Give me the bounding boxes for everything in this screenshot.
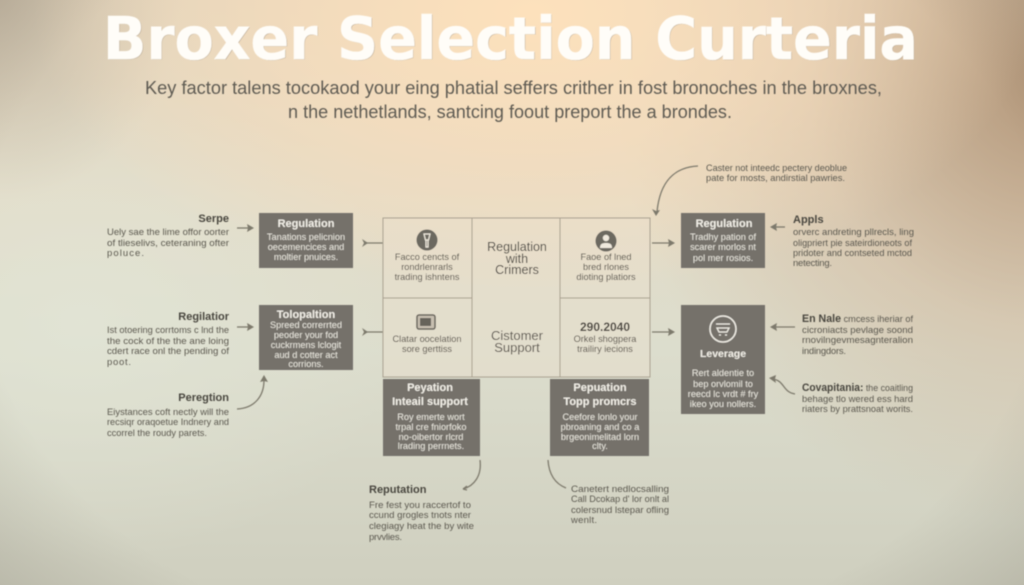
text: cell lower left — [393, 334, 461, 354]
panel: Regulation left: oecemencices and — [268, 242, 344, 252]
heading: Regulation with Crimers: Regulation — [487, 240, 547, 254]
panel: Regulation right: Tradhy pation of — [690, 232, 756, 242]
text block: Catefert note: colersnud lstepar ofling — [571, 505, 669, 516]
text block: En Nale: rnovilngevmesagnteralion — [802, 335, 913, 346]
text: cell top left: Facco cencts of — [395, 252, 460, 262]
arrow: Payation to Reputation — [463, 460, 480, 490]
text block: Regulatior: cdert race onl the pending of — [107, 346, 229, 357]
panel: Regulation right: Regulation — [696, 218, 753, 230]
text: cell top right: dioting platiors — [576, 272, 636, 282]
panel: Pepuation: clty. — [592, 441, 608, 451]
text block: Reputation — [369, 484, 474, 543]
icon: monitor — [417, 315, 435, 329]
icon: key — [416, 230, 438, 250]
panel: Leverage — [681, 305, 765, 414]
heading: Customer Support: Support — [494, 340, 540, 355]
stat: 290.2040: Orkel shogpera — [574, 334, 637, 344]
text block: Appls: orverc andreting pllrecls, ling — [793, 227, 914, 238]
arrow: grid to Leverage — [652, 328, 675, 336]
text block: Catefert note: wenlt. — [570, 515, 597, 526]
text block: Serpe: Serpe — [198, 213, 229, 225]
panel: Telopation: Spreed correrrted — [270, 320, 342, 330]
text block: Peregtion: ccorrel the roudy parets. — [107, 428, 207, 439]
text block: Appls: pridoter and contseted mctod — [793, 248, 912, 259]
text: cell lower left: sore gerttiss — [402, 344, 452, 354]
text block: Reputation: ccund grogles tnots nter — [369, 510, 471, 521]
text block: Covapitania — [802, 382, 913, 415]
text: cell top right: Faoe of lned — [580, 252, 632, 262]
panel: Telopation: cuckrmens lclogit — [271, 340, 342, 350]
text block: Catefert note — [570, 484, 669, 526]
text block: Catefert note: Call Dcokap d' lor onlt al — [571, 494, 669, 505]
panel: Regulation right — [681, 213, 765, 268]
text block: Peregtion: recsiqr oraqoetue Indnery and — [107, 417, 229, 428]
panel: Payation: Inteail support — [392, 396, 468, 408]
text block: Peregtion: Peregtion — [178, 392, 229, 404]
connector: Regulation to grid — [362, 239, 383, 247]
arrow: grid to Regulation right — [652, 239, 675, 247]
text: cell top right — [576, 252, 636, 282]
text block: Appls: oligpriert pie sateirdioneots of — [793, 238, 912, 249]
panel: Regulation left: Tanations pelicnion — [267, 232, 345, 242]
text block: Regulatior — [107, 311, 230, 368]
panel: Telopation: corrions. — [288, 359, 324, 369]
panel: Leverage: ikeo you nollers. — [690, 399, 756, 409]
text block: Reputation: Fre fest you raccertof to — [369, 500, 471, 511]
text block: Catefert note: Canetert nedlocsalling — [571, 484, 669, 495]
subtitle: Key factor talens tocokaod your eing phatial seffers crither in fost bronoches in the broxnes, — [145, 77, 882, 98]
text block: En Nale: indingdors. — [802, 346, 846, 357]
text block: Reputation: Reputation — [369, 484, 427, 496]
arrow: En Nale to Leverage — [770, 323, 795, 331]
icon: cart — [710, 316, 736, 342]
text block: Serpe: poluce. — [107, 248, 144, 259]
text block: Reputation: clegiagy heat the by wite — [369, 521, 474, 532]
heading: Regulation with Crimers: Crimers — [495, 263, 539, 277]
text: cell top right: bred rlones — [583, 262, 629, 272]
heading: Customer Support — [491, 328, 544, 355]
panel: Payation: no-oibertor rlcrd — [399, 432, 463, 442]
subtitle — [145, 77, 882, 122]
panel: Telopation — [259, 305, 353, 370]
text: cell top left — [395, 252, 460, 282]
stat: 290.2040: 290.2040 — [580, 320, 630, 334]
panel: Telopation: peoder your fod — [274, 330, 338, 340]
panel: Regulation left — [259, 213, 353, 268]
text block: En Nale: cicroniacts pevlage soond — [802, 325, 913, 336]
heading: Regulation with Crimers — [487, 240, 547, 277]
text block: Appls — [793, 214, 914, 269]
panel: Regulation right: pol mer rosios. — [693, 253, 753, 263]
text block: top note: Caster not inteedc pectery deoblue — [706, 163, 847, 174]
text block: Peregtion: Eiystances coft nectly will the — [107, 407, 229, 418]
panel: Regulation right: scarer morlos nt — [690, 242, 756, 252]
panel: Leverage: reecd lc vrdt # fry — [688, 389, 759, 399]
heading: Regulation with Crimers: with — [505, 252, 528, 266]
panel: Leverage: Leverage — [700, 348, 746, 360]
text block: En Nale: En Nale cmcess iheriar of — [802, 313, 913, 325]
panel: Pepuation — [550, 379, 649, 456]
arrow: Pepuation to note — [548, 460, 566, 488]
panel: Pepuation: Pepuation — [573, 382, 627, 394]
stat: 290.2040 — [574, 320, 637, 354]
panel: Leverage: Rert aldentie to — [692, 368, 754, 378]
text block: Reputation: prvvlies. — [369, 532, 402, 543]
subtitle: n the nethetlands, santcing foout preport the a brondes. — [288, 101, 732, 122]
text block: Serpe: of tlieselivs, ceteraning ofter — [107, 238, 229, 249]
title: Broxer Selection Curteria — [103, 4, 918, 73]
stat: 290.2040: trailiry iecions — [577, 344, 633, 354]
panel: Leverage: bep orvlomil to — [693, 379, 753, 389]
text: cell top left: trading ishntens — [395, 272, 460, 282]
connector: Telopation to grid — [362, 328, 383, 336]
text: cell top left: rondrlenrarls — [401, 262, 453, 272]
panel: central grid — [383, 218, 650, 377]
text block: Regulatior: Regilatior — [178, 311, 230, 323]
text block: Appls: netecting. — [793, 258, 832, 269]
panel: Regulation left: Regulation — [278, 218, 335, 230]
panel: Payation: lrading perrnets. — [398, 441, 464, 451]
arrow: Peregtion to Telopation — [237, 375, 268, 409]
text block: Regulatior: the cock of the the ane loing — [107, 336, 229, 347]
text block: Peregtion — [107, 392, 229, 439]
arrow: Serpe to Regulation — [237, 224, 254, 232]
panel: Payation: trpal cre fniorfoko — [396, 422, 466, 432]
arrow: Appls to Regulation — [770, 223, 785, 231]
text block: top note — [706, 163, 847, 184]
panel: Pepuation: Topp promcrs — [563, 396, 637, 408]
panel: Pepuation: pbroaning and co a — [561, 422, 640, 432]
panel: Payation: Peyation — [407, 382, 453, 394]
panel: Payation: Roy emerte wort — [397, 412, 465, 422]
text: cell lower left: Clatar oocelation — [393, 334, 461, 344]
panel: Telopation: Tolopaltion — [277, 309, 336, 321]
panel: Telopation: aud d cotter act — [274, 350, 338, 360]
icon: person — [596, 230, 616, 252]
panel: Pepuation: Ceefore lonlo your — [562, 412, 638, 422]
text block: Appls: Appls — [793, 214, 824, 226]
arrow: top note to Regulation — [652, 166, 698, 216]
panel: Payation — [383, 379, 480, 456]
text block: Regulatior: poot. — [107, 357, 131, 368]
text block: Serpe: Uely sae the lime offor oorter — [107, 227, 229, 238]
text block: Covapitania: riaters by prattsnoat worits. — [802, 404, 913, 415]
panel: Regulation left: moltier pnuices. — [274, 252, 338, 262]
arrow: Covapitania to Leverage — [769, 375, 795, 394]
heading: Customer Support: Cistomer — [491, 328, 544, 343]
text block: En Nale — [802, 313, 913, 357]
arrow: Regulatior to Telopation — [237, 323, 254, 331]
title: Broxer Selection Curteria — [104, 5, 919, 74]
panel: Pepuation: brgeonimelitad lorn — [561, 432, 639, 442]
text block: top note: pate for mosts, andirstial pawries. — [706, 173, 845, 184]
text block: Covapitania: behage tlo wered ess hard — [802, 394, 913, 405]
text block: Covapitania: Covapitania: the coaitling — [802, 382, 913, 394]
text block: Regulatior: Ist otoering corrtoms c lnd the — [107, 325, 229, 336]
text block: Serpe — [107, 213, 229, 259]
